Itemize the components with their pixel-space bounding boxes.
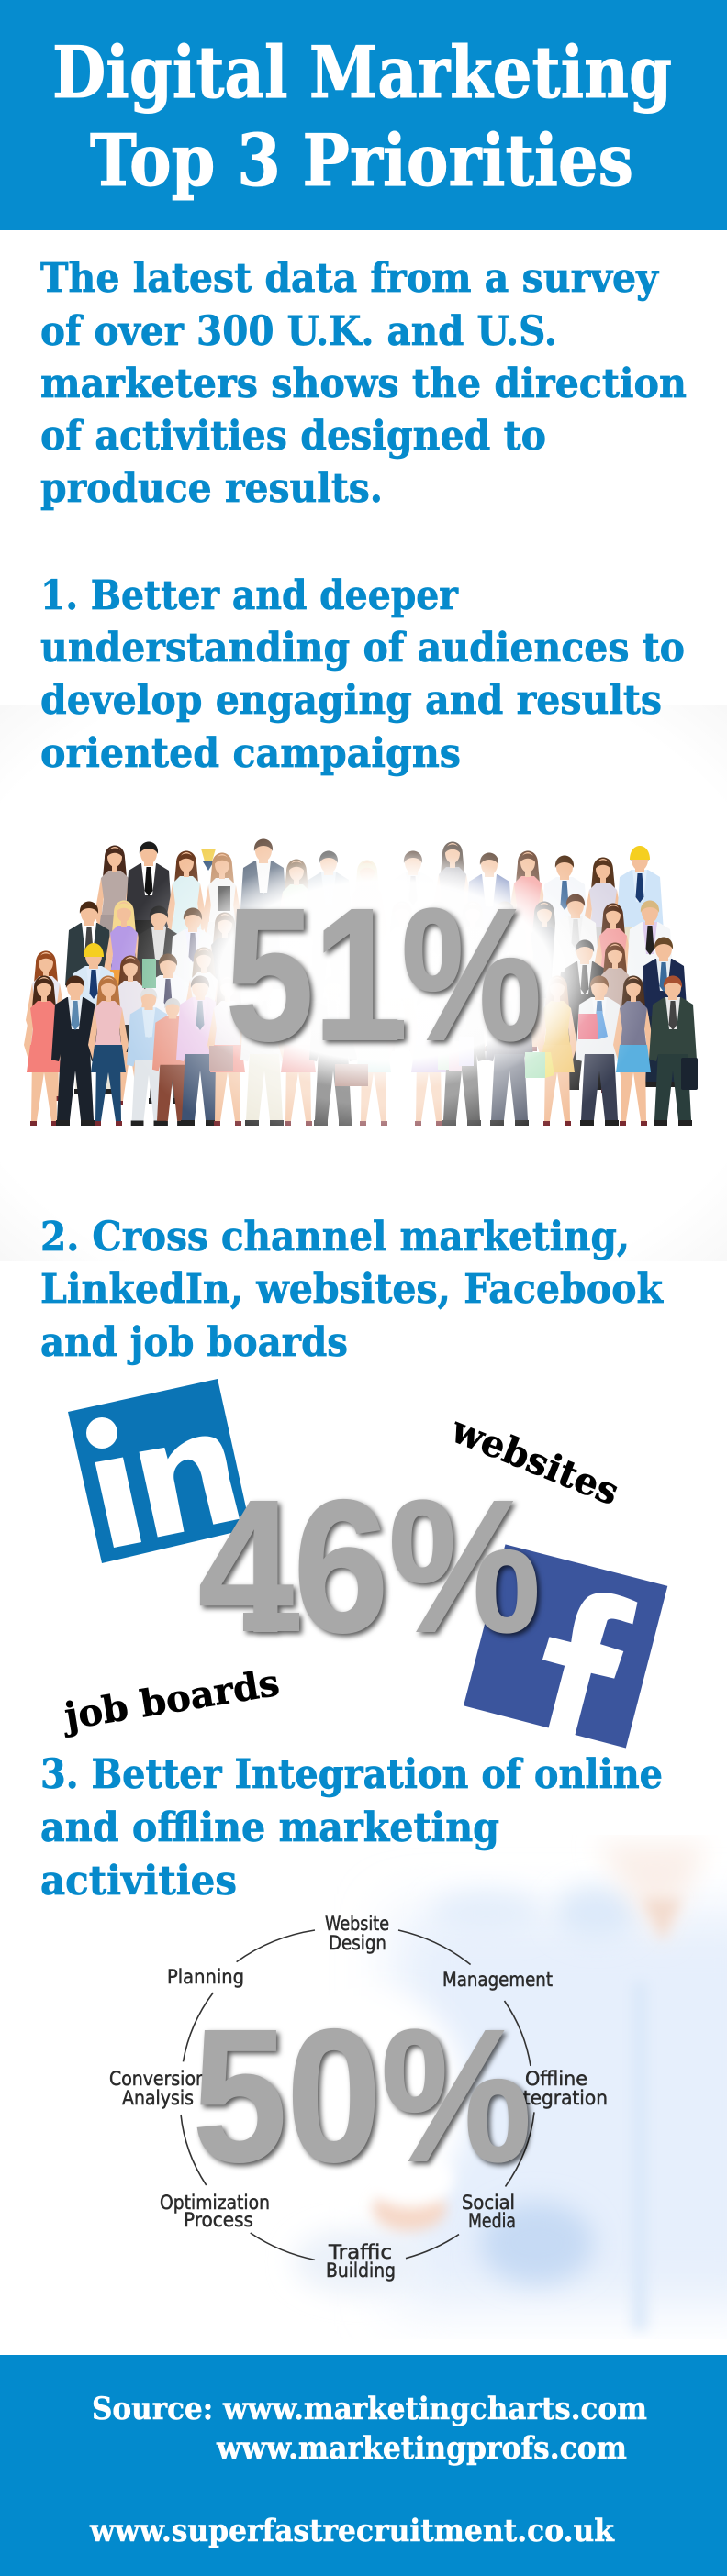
source line 2: www.marketingprofs.com [216,2430,627,2467]
cycle label: Website Design: Website [325,1913,389,1935]
statistic: 50%: 50% [193,1991,531,2201]
back row of people [95,838,664,1010]
cycle label: Offline Integration: Integration [506,2087,608,2109]
heading: priority 1: develop engaging and results [40,677,662,724]
heading: priority 2: LinkedIn, websites, Facebook [40,1266,664,1313]
cycle label: Optimization Process [160,2192,270,2231]
middle row of people [65,894,674,1062]
hard hat, third row [84,943,104,957]
cycle label: Traffic Building: Building [326,2260,396,2282]
label: websites: websites [444,1407,625,1514]
header banner [0,0,727,230]
cycle label: Offline Integration [506,2068,608,2109]
cycle label: Website Design: Design [329,1932,386,1954]
statistic: 51%: 51% [226,870,542,1080]
cycle label: Social Media: Social [462,2192,515,2214]
label: job boards: job boards [59,1661,283,1738]
cycle label: Offline Integration: Offline [525,2068,587,2090]
intro text block: marketers shows the direction [40,361,687,407]
hard hat, back row [630,846,650,860]
icon: LinkedIn logo [68,1379,251,1563]
chart: marketing cycle diagram [109,1913,608,2282]
cycle label: Social Media: Media [468,2210,516,2232]
cycle label: Social Media [462,2192,516,2232]
faint background panel: section 1 [0,705,727,1261]
heading: priority 2: and job boards [40,1319,348,1366]
background photo: blurred hand and shirt [266,1844,727,2330]
heading: priority 2: 2. Cross channel marketing, [40,1214,630,1260]
illustration: crowd of people [24,803,698,1170]
cycle label: Optimization Process: Process [184,2209,253,2231]
heading: priority 3: and offline marketing [40,1804,499,1851]
title line 2: Top 3 Priorities [90,119,633,203]
intro text block [40,255,687,512]
statistic: 46%: 46% [198,1461,541,1671]
cycle label: Optimization Process: Optimization [160,2192,270,2214]
cycle label: Traffic Building [326,2241,396,2282]
heading: priority 1: 1. Better and deeper [40,572,459,619]
heading: priority 3 [40,1751,663,1904]
heading: priority 1 [40,572,685,777]
intro text block: The latest data from a survey [40,255,659,302]
cycle label: Traffic Building: Traffic [328,2241,392,2263]
website url: www.superfastrecruitment.co.uk [89,2513,615,2549]
icon: Facebook logo [464,1544,667,1749]
cycle label: Conversion Analysis: Analysis [122,2087,194,2109]
intro text block: produce results. [40,465,383,512]
cycle label: Planning: Planning [167,1966,244,1988]
heading: priority 3: activities [40,1858,237,1904]
front row of people [24,976,697,1126]
third row of people [26,938,688,1105]
source line 1: Source: www.marketingcharts.com [92,2391,647,2427]
heading: priority 1: oriented campaigns [40,730,461,777]
footer banner [0,2355,727,2576]
heading: priority 2 [40,1214,664,1366]
white fade over crowd centre [115,803,647,1170]
heading: priority 3: 3. Better Integration of online [40,1751,663,1798]
shopping bags and briefcases [142,959,698,1090]
intro text block: of activities designed to [40,413,546,460]
cycle label: Conversion Analysis: Conversion [109,2068,207,2090]
cycle label: Conversion Analysis [109,2068,207,2109]
cycle label: Website Design [325,1913,389,1954]
cycle arcs [181,1930,534,2260]
intro text block: of over 300 U.K. and U.S. [40,308,557,355]
cycle label: Management: Management [442,1969,553,1991]
heading: priority 1: understanding of audiences to [40,625,685,672]
